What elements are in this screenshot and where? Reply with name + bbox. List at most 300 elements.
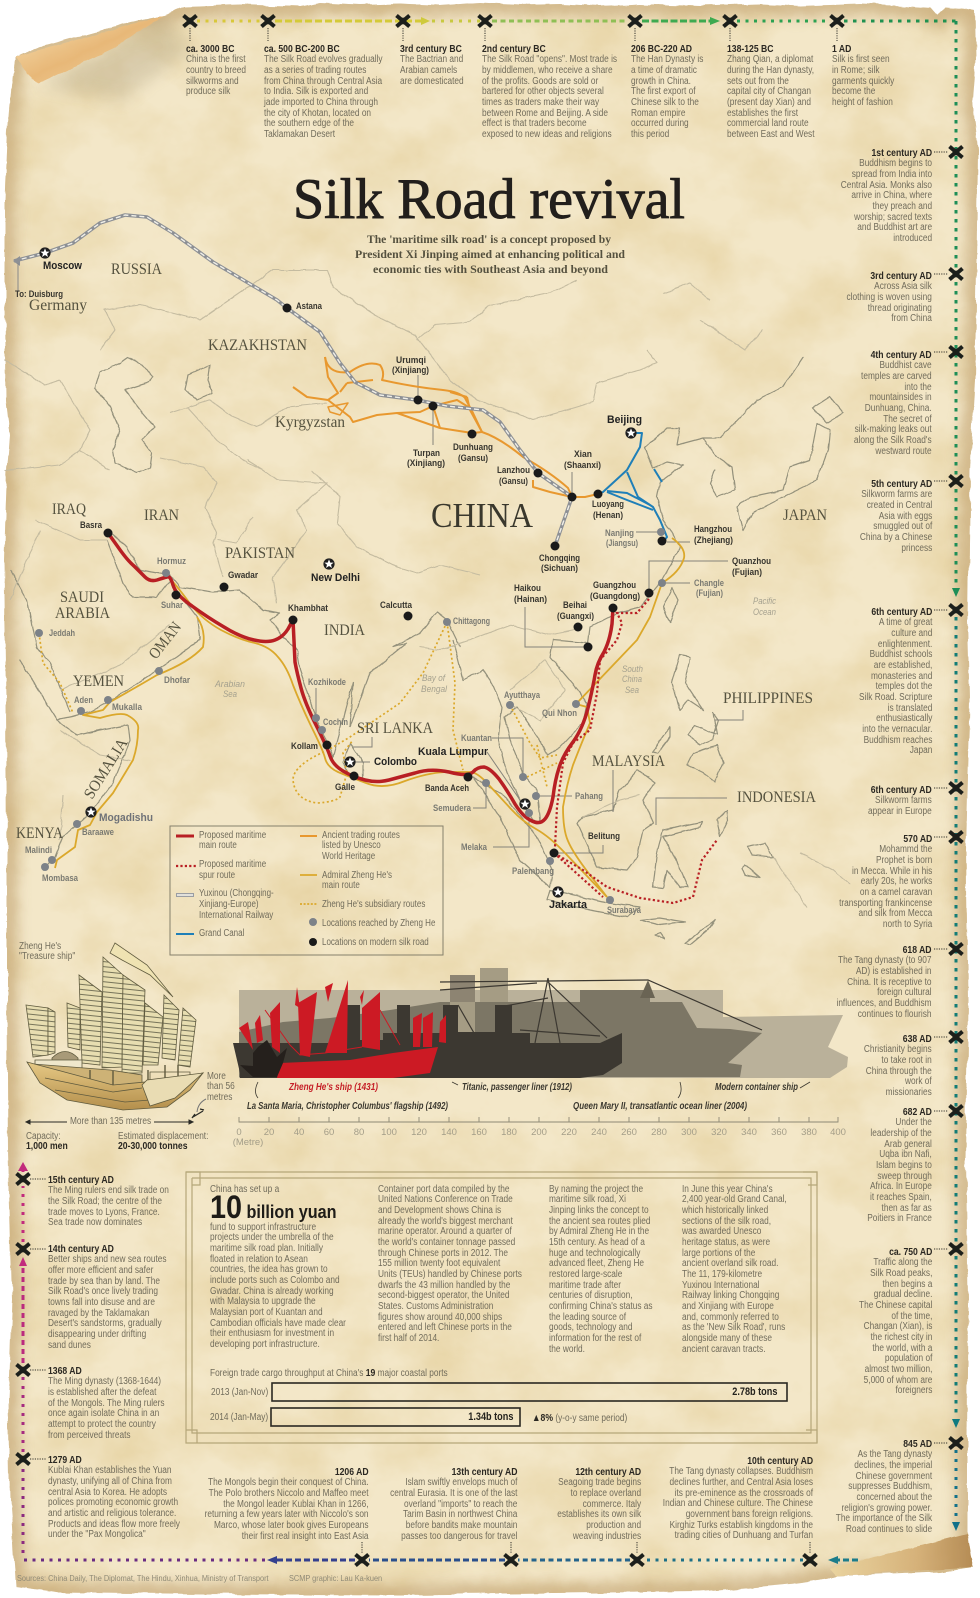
right timeline: ca. 750 AD: Silk Road peaks, (870, 1268, 932, 1279)
panel: column 1 text: floated in relation to Asean (210, 1254, 308, 1265)
legend text: right column: Locations reached by Zheng He (322, 918, 435, 929)
legend text: left column (199, 830, 274, 939)
ship displacement: 20-30,000 tonnes (118, 1141, 188, 1152)
city labels: Hormuz (157, 556, 186, 566)
city labels: Nanjing (605, 528, 634, 538)
top timeline: 2nd century BC: of the profits. Goods are sold or (482, 76, 598, 87)
top timeline: ca. 3000 BC: China is the first (186, 54, 246, 65)
metre scale axis: 60 (324, 1127, 334, 1138)
city labels: Basra (80, 520, 103, 530)
panel: 10 billion yuan headline: 10 billion yuan (210, 1188, 337, 1224)
right timeline: 618 AD: influences, and Buddhism (837, 998, 932, 1009)
right timeline: 6th century AD: Silk Road. Scripture (859, 692, 932, 703)
metre scale axis: 380 (801, 1127, 817, 1138)
right timeline: 682 AD: Africa. In Europe (870, 1181, 932, 1192)
panel: column 4 text: as the 'New Silk Road', runs (682, 1322, 785, 1333)
sea labels: Bengal (421, 684, 448, 694)
top timeline: ca. 500 BC-200 BC: The Silk Road evolves gradually (264, 54, 383, 65)
bottom timeline: 13th century AD: Islam swiftly envelops much of (405, 1477, 517, 1488)
sea labels: South (622, 664, 643, 674)
top timeline: 206 BC-220 AD: The Han Dynasty is (631, 54, 703, 65)
metre scale axis: 0 (236, 1127, 242, 1138)
top timeline: 2nd century BC: by middlemen, who receive a share (482, 65, 613, 76)
top timeline: ca. 500 BC-200 BC: jade imported to China through (264, 97, 378, 108)
panel: column 2 text: entered and left Chinese ports in the (378, 1322, 512, 1333)
right timeline: 5th century AD: Silkworm farms are (861, 489, 932, 500)
panel: column 3 text: information for the rest of (549, 1333, 641, 1344)
city labels: (Gansu) (458, 453, 488, 463)
bottom timeline: 1206 AD: the Mongol leader Kublai Khan in 1266, (224, 1499, 369, 1510)
top timeline: ca. 3000 BC: silkworms and (186, 76, 239, 87)
city labels: Urumqi (396, 355, 426, 365)
panel: column 4 text: which historically linked (682, 1205, 768, 1216)
city labels: Mogadishu (99, 812, 153, 824)
metre scale axis: 360 (771, 1127, 787, 1138)
right timeline: 6th century AD: enlightenment. (878, 639, 932, 650)
right timeline: ca. 750 AD: ca. 750 AD (889, 1246, 932, 1258)
left timeline: 14th century AD: trade by sea than by land. The (48, 1276, 160, 1287)
subtitle: economic ties with Southeast Asia and beyond (373, 262, 608, 276)
left timeline: 15th century AD: the Silk Road; the centre of the (48, 1196, 162, 1207)
right timeline: 682 AD: it reaches Spain, (870, 1192, 932, 1203)
panel: column 1 text: Malaysian port of Kuantan and (210, 1307, 323, 1318)
right timeline: ca. 750 AD: of the time, (891, 1311, 932, 1322)
right timeline: 682 AD: Poitiers in France (867, 1213, 932, 1224)
Titanic silhouette (233, 1005, 622, 1078)
right timeline: ca. 750 AD (859, 1246, 932, 1396)
city labels: Banda Aceh (425, 783, 469, 793)
top timeline: 1 AD: height of fashion (832, 97, 893, 108)
ship height note: than 56 (207, 1081, 235, 1092)
country labels: CHINA (431, 496, 534, 535)
metre scale axis: 140 (441, 1127, 457, 1138)
right timeline: 570 AD: north to Syria (883, 919, 932, 930)
bottom timeline: 12th century AD: to replace overland (570, 1488, 641, 1499)
top timeline: 138-125 BC: commercial land route (727, 118, 809, 129)
right timeline: 618 AD: China. It is receptive to (848, 977, 932, 988)
ship length note: More than 135 metres (70, 1116, 151, 1126)
city labels: (Xinjiang) (392, 365, 429, 375)
city labels: Haikou (514, 583, 541, 593)
city labels: Beijing (607, 414, 642, 426)
bottom timeline: 1206 AD: The Mongols begin their conquest of China. (208, 1477, 369, 1488)
right timeline: 618 AD: continues to flourish (858, 1009, 932, 1020)
country labels: MALAYSIA (592, 753, 665, 770)
city labels: Mukalla (112, 702, 143, 712)
city labels: Malindi (25, 845, 52, 855)
right timeline: 4th century AD: silk-making leaks out (855, 424, 932, 435)
right timeline: 570 AD: on a camel caravan (860, 887, 932, 898)
legend text: right column: Ancient trading routes (322, 830, 400, 840)
panel: column 3 text: advanced fleet, Zheng He (549, 1258, 644, 1269)
metre scale axis: 200 (531, 1127, 547, 1138)
bottom timeline: 12th century AD: weaving industries (573, 1531, 641, 1542)
top timeline: ca. 3000 BC: ca. 3000 BC (186, 44, 234, 54)
treasure ship dimension arrows (26, 1099, 206, 1124)
panel: column 3 text: the leading source of (549, 1312, 626, 1323)
panel: column 4 text: The 11, 179-kilometre (682, 1269, 762, 1280)
country labels: SAUDI (60, 589, 104, 606)
right timeline: 5th century AD (860, 478, 932, 554)
panel: column 2 text: marine operator. Around a quarter of (378, 1226, 512, 1237)
legend text: right column: Locations on modern silk road (322, 937, 429, 948)
top timeline: 2nd century BC: bartered for other objects several (482, 86, 604, 97)
right timeline: 6th century AD: Buddhist schools (869, 649, 932, 660)
top timeline: ca. 500 BC-200 BC: the city of Khotan, located on (264, 108, 371, 119)
panel: column 3 text: 15th century. As head of a (549, 1237, 645, 1248)
left timeline: 1279 AD (48, 1454, 180, 1540)
country labels: SOMALIA (81, 735, 132, 802)
sea labels (214, 596, 776, 699)
top timeline: 206 BC-220 AD: Roman empire (631, 108, 685, 119)
title: Silk Road revival (293, 168, 685, 231)
city labels: Jeddah (49, 628, 75, 638)
location dots reached by Zheng He (35, 528, 666, 904)
city labels: Moscow (43, 260, 82, 272)
bottom timeline: 1206 AD: The Polo brothers Niccolo and Maffeo meet (209, 1488, 369, 1499)
top timeline: 206 BC-220 AD: growth in China. (631, 76, 691, 87)
right timeline: 618 AD: 618 AD (903, 944, 932, 956)
left timeline: 1368 AD: 1368 AD (48, 1366, 82, 1376)
right timeline: ca. 750 AD: almost two million, (864, 1364, 932, 1375)
panel: column 1 text: their enthusiasm for investment in (210, 1328, 334, 1339)
left timeline: 14th century AD: offer more efficient and safer (48, 1265, 153, 1276)
bottom timeline: 10th century AD: declines further, and Central Asia loses (670, 1477, 813, 1488)
right timeline: 638 AD: missionaries (886, 1087, 932, 1098)
right timeline: 638 AD: to take root in (882, 1055, 932, 1066)
right timeline: ca. 750 AD: Changan (Xian), is (863, 1321, 932, 1332)
panel: column 3 text: maritime trade after (549, 1280, 621, 1291)
bottom timeline: 12th century AD: 12th century AD (575, 1466, 641, 1478)
city labels: Baraawe (82, 827, 114, 837)
right timeline: 618 AD: foreign cultural (878, 987, 932, 998)
country labels: IRAN (144, 507, 179, 524)
legend text: right column: Admiral Zheng He's (322, 870, 392, 881)
top timeline: ca. 3000 BC: country to breed (186, 65, 246, 76)
panel: column 2 text: first half of 2014. (378, 1333, 439, 1344)
city labels: Semudera (433, 803, 472, 813)
country labels: Germany (29, 297, 87, 314)
top timeline: 3rd century BC: are domesticated (400, 76, 464, 87)
panel: column 2 text: figures show around 40,000 ships (378, 1312, 502, 1323)
sea labels: Ocean (753, 607, 776, 617)
panel: column 1 text (210, 1222, 346, 1351)
top timeline: 3rd century BC (400, 44, 464, 87)
country labels: SRI LANKA (357, 720, 433, 737)
ship name labels: Modern container ship (715, 1082, 798, 1093)
panel: column 4 text: alongside many of these (682, 1333, 772, 1344)
city labels: (Zhejiang) (694, 535, 733, 545)
city labels: Xian (574, 449, 592, 459)
top timeline: 2nd century BC: 2nd century BC (482, 44, 546, 54)
left timeline: 15th century AD (48, 1174, 169, 1228)
left timeline: 1368 AD: The Ming dynasty (1368-1644) (48, 1376, 161, 1387)
right timeline: 682 AD: 682 AD (903, 1106, 932, 1118)
city labels: Chongqing (539, 553, 580, 563)
panel: column 3 text: restored large-scale (549, 1269, 622, 1280)
city labels: Calcutta (380, 600, 413, 610)
right timeline: 845 AD: religion's growing power. (841, 1503, 932, 1514)
right timeline: ca. 750 AD: The Chinese capital (859, 1300, 932, 1311)
top timeline: 138-125 BC: (present day Xian) and (727, 97, 811, 108)
bottom timeline: 13th century AD: central Eurasia. It is one of the last (390, 1488, 517, 1499)
city labels: (Hainan) (514, 594, 547, 604)
right timeline: ca. 750 AD: then begins a (882, 1279, 932, 1290)
bottom timeline: 10th century AD (663, 1456, 814, 1541)
ship capacity: 1,000 men (26, 1141, 68, 1152)
country labels: YEMEN (73, 673, 124, 690)
treasure ship caption (19, 940, 75, 962)
city labels: (Guangxi) (557, 611, 594, 621)
right timeline: 6th century AD: A time of great (878, 617, 932, 628)
chart label 2014: 2014 (Jan-May) (210, 1412, 268, 1422)
leader lines for labels (316, 375, 743, 853)
panel: column 4 text: and, commonly referred to (682, 1312, 779, 1323)
right timeline: 570 AD: early 20s, he works (860, 876, 932, 887)
panel: column 1 text: with Malaysia to upgrade the (210, 1296, 316, 1307)
route: Zheng He subsidiary routes (dotted gold) (39, 622, 557, 803)
panel: column 3 text: huge and technologically (549, 1248, 640, 1259)
timeline: bottom segment (23, 1556, 858, 1564)
top timeline: ca. 500 BC-200 BC: the southern edge of the (264, 118, 354, 129)
bottom timeline: 13th century AD: before bandits make mountain (405, 1520, 517, 1531)
ship name labels: Zheng He's ship (1431) (288, 1082, 379, 1093)
right timeline: 845 AD: concerned about the (856, 1492, 932, 1503)
left timeline: 14th century AD: disappearing under drifting (48, 1329, 146, 1340)
right timeline: 3rd century AD: from China (891, 313, 932, 324)
panel: column 4 text: heritage status, as were (682, 1237, 770, 1248)
left timeline: 1368 AD: once again isolate China in an (48, 1408, 159, 1419)
graphic credit: SCMP graphic: Lau Ka-kuen (289, 1574, 382, 1582)
right timeline: 638 AD: Christianity begins (864, 1044, 932, 1055)
right timeline: 1st century AD: 1st century AD (871, 148, 932, 158)
city labels: Luoyang (592, 499, 624, 509)
panel: column 3 text: centuries of disruption, (549, 1290, 633, 1301)
right timeline: 570 AD: transporting frankincense (839, 898, 932, 909)
top timeline: 1 AD (832, 44, 894, 108)
panel: column 4 text (682, 1184, 787, 1355)
sea labels: Arabian (214, 679, 245, 689)
bottom timeline: 10th century AD: The Tang dynasty collapses. Buddhism (669, 1466, 813, 1477)
panel: column 4 text: Railway linking Chongqing (682, 1290, 779, 1301)
metre scale axis: 400 (830, 1127, 846, 1138)
legend box (170, 826, 443, 955)
right timeline: 4th century AD: temples are carved (861, 371, 932, 382)
right timeline: 1st century AD: Central Asia. Monks also (841, 180, 932, 191)
top timeline: ca. 500 BC-200 BC (264, 44, 383, 140)
panel: column 4 text: sections of the silk road, (682, 1216, 771, 1227)
panel: column 3 text: maritime silk road, Xi (549, 1194, 626, 1205)
sea labels: Pacific (753, 596, 776, 606)
panel: column 4 text: ancient overland silk road. (682, 1258, 778, 1269)
country labels: PHILIPPINES (723, 690, 813, 707)
right timeline: 3rd century AD: thread originating (868, 303, 932, 314)
panel: column 4 text: In June this year China's (682, 1184, 773, 1194)
right timeline: 845 AD: 845 AD (903, 1438, 932, 1450)
right timeline: 4th century AD: mountainsides in (870, 392, 932, 403)
top timeline: 2nd century BC: The Silk Road "opens". Most trade is (482, 54, 617, 65)
left timeline: 14th century AD: ravaged by the Taklamakan (48, 1308, 149, 1319)
city labels: Gwadar (228, 570, 258, 580)
metre scale axis: 320 (711, 1127, 727, 1138)
panel: column 4 text: ancient caravan tracts. (682, 1344, 766, 1355)
info panel frame (186, 1172, 817, 1443)
right timeline: 6th century AD, Europe: appear in Europe (868, 806, 932, 817)
top timeline: 138-125 BC: Zhang Qian, a diplomat (727, 54, 813, 65)
panel: column 2 text (378, 1184, 522, 1345)
left timeline: 15th century AD: 15th century AD (48, 1174, 114, 1186)
ship displacement (118, 1132, 208, 1153)
Santa Maria silhouette (240, 1040, 287, 1077)
top timeline: 1 AD: 1 AD (832, 44, 851, 54)
right timeline: 845 AD: Road continues to slide (846, 1524, 932, 1535)
metre scale axis: 180 (501, 1127, 517, 1138)
city labels: Cochin (323, 717, 348, 727)
legend text: left column: Yuxinou (Chongqing- (199, 888, 274, 899)
city labels: (Shaanxi) (564, 460, 601, 470)
top timeline: 2nd century BC: exposed to new ideas and religions (482, 129, 612, 140)
map base: land borders (5, 270, 850, 907)
ship name labels: Titanic, passenger liner (1912) (462, 1082, 573, 1093)
left timeline: 15th century AD: trade moves to Lyons, France. (48, 1207, 160, 1218)
left timeline: 1368 AD: of the Mongols. The Ming rulers (48, 1398, 165, 1409)
panel: column 3 text: By naming the project the (549, 1184, 643, 1194)
bottom timeline: 1206 AD (205, 1466, 369, 1542)
left timeline: 1279 AD: dynasty, unifying all of China from (48, 1476, 172, 1487)
bottom timeline: 12th century AD (557, 1466, 642, 1542)
bottom timeline: 13th century AD: 13th century AD (451, 1466, 517, 1478)
right timeline: 638 AD (864, 1034, 932, 1098)
city labels: (Fujian) (696, 588, 723, 598)
treasure ship illustration (26, 943, 203, 1110)
timeline: top segment (197, 17, 956, 25)
map base: coastlines and borders (10, 357, 843, 945)
Zheng He ship silhouette (239, 980, 446, 1078)
legend text: right column (322, 830, 436, 948)
top timeline: 2nd century BC: between Rome and Beijing. A side (482, 108, 608, 119)
ship height note: metres (207, 1092, 232, 1103)
sources: Sources: China Daily, The Diplomat, The Hindu, Xinhua, Ministry of Transport (17, 1574, 269, 1582)
panel: column 3 text (549, 1184, 653, 1355)
bottom timeline: 10th century AD: government bans foreign religions. (686, 1509, 813, 1520)
route: Yuxinou railway (14, 215, 572, 546)
treasure ship caption: "Treasure ship" (19, 951, 75, 962)
left timeline: 14th century AD: Better ships and new sea routes (48, 1254, 167, 1265)
metre scale axis: 300 (681, 1127, 697, 1138)
legend text: right column: main route (322, 880, 360, 891)
left timeline: 14th century AD: towns fall into disuse and are (48, 1297, 155, 1308)
chart change note: ▲8% (y-o-y same period) (532, 1412, 627, 1424)
right timeline: 4th century AD: 4th century AD (871, 350, 932, 360)
metre scale axis (233, 1117, 846, 1148)
subtitle: President Xi Jinping aimed at enhancing political and (355, 247, 625, 261)
panel: column 2 text: and Development shows China is (378, 1205, 501, 1216)
city labels: Kollam (291, 741, 318, 751)
city labels: Melaka (461, 842, 488, 852)
panel: column 1 text: Gwadar. China is already working (210, 1286, 334, 1297)
city labels: Suhar (161, 600, 183, 610)
city labels: (Xinjiang) (407, 458, 445, 468)
left timeline: 1279 AD: central Asia to Korea. He adopts (48, 1487, 167, 1498)
sea labels: Bay of (422, 673, 446, 683)
right timeline: ca. 750 AD: Traffic along the (873, 1257, 932, 1268)
left timeline: 15th century AD: Sea trade now dominates (48, 1217, 142, 1228)
ship height note: More (207, 1070, 226, 1082)
panel: column 3 text: confirming China's status as (549, 1301, 653, 1312)
panel: column 3 text: the world. (549, 1344, 585, 1355)
left timeline: 1279 AD: Kublai Khan establishes the Yuan (48, 1465, 172, 1476)
panel: column 2 text: through Chinese ports in 2012. The (378, 1248, 508, 1259)
city labels: Mombasa (42, 873, 79, 883)
sea labels: Sea (223, 689, 237, 699)
right timeline: 682 AD: leadership of the (871, 1128, 932, 1139)
right timeline: 618 AD: AD) is established in (856, 966, 932, 977)
city labels: Dhofar (164, 675, 190, 685)
top timeline: 138-125 BC: 138-125 BC (727, 44, 774, 54)
country labels: Kyrgyzstan (275, 414, 345, 431)
right timeline: 5th century AD: China by a Chinese (860, 532, 932, 543)
right timeline: 3rd century AD: clothing is woven using (847, 292, 932, 303)
right timeline: 682 AD: Islam begins to (876, 1160, 932, 1171)
city labels: Khambhat (288, 603, 328, 613)
city labels: Changle (694, 578, 724, 588)
metre scale axis: 220 (561, 1127, 577, 1138)
left timeline: 1279 AD: 1279 AD (48, 1454, 82, 1466)
city labels: Turpan (413, 448, 440, 458)
top timeline: 138-125 BC: capital city of Changan (727, 86, 811, 97)
right timeline: 845 AD: suppresses Buddhism, (848, 1481, 932, 1492)
route: Grand Canal (blue) (598, 433, 667, 542)
city labels: Dunhuang (453, 442, 493, 452)
location dots on modern silk road (104, 304, 666, 858)
city labels: Galle (335, 782, 355, 792)
top timeline: ca. 3000 BC (186, 44, 246, 97)
panel: column 1 text: maritime silk road plan. Initially (210, 1243, 323, 1254)
right timeline: 570 AD: and silk from Mecca (858, 908, 932, 919)
top timeline: ca. 500 BC-200 BC: Taklamakan Desert (264, 129, 335, 140)
right timeline: 6th century AD: are established, (873, 660, 932, 671)
right timeline: 845 AD (836, 1438, 932, 1535)
timeline: left segment (18, 1162, 28, 1553)
top timeline: ca. 500 BC-200 BC: ca. 500 BC-200 BC (264, 44, 340, 54)
city labels: Kuala Lumpur (418, 746, 489, 758)
left timeline: 14th century AD: 14th century AD (48, 1244, 114, 1254)
bottom timeline: 13th century AD: passes too dangerous for travel (401, 1531, 517, 1542)
city labels: Lanzhou (497, 465, 530, 475)
right timeline: 845 AD: declines, the imperial (854, 1460, 932, 1471)
panel: column 1 text: Cambodian officials have made clear (210, 1318, 346, 1329)
panel: column 4 text: was awarded Unesco (682, 1226, 761, 1237)
legend text: right column: Zheng He's subsidiary routes (322, 899, 425, 910)
right timeline: 682 AD: Under the (896, 1117, 932, 1128)
legend text: left column: spur route (199, 870, 235, 881)
panel: column 1 text: fund to support infrastructure (210, 1222, 316, 1232)
panel: column 1 text: include ports such as Colombo and (210, 1275, 340, 1286)
metre scale axis: 100 (381, 1127, 397, 1138)
right timeline: 4th century AD: Dunhuang, China. (865, 403, 932, 414)
panel: column 1 text: countries, the idea has grown to (210, 1264, 328, 1275)
right timeline: 6th century AD: Buddhism reaches (863, 735, 932, 746)
right timeline: ca. 750 AD: foreigners (895, 1385, 932, 1396)
city labels: (Gansu) (499, 476, 528, 486)
top timeline: 1 AD: Silk is first seen (832, 54, 890, 65)
right timeline: 5th century AD: princess (901, 543, 932, 554)
city labels: To: Duisburg (15, 289, 63, 299)
sea labels: China (622, 674, 642, 684)
legend text: left column: Xinjiang-Europe) (199, 899, 259, 910)
panel: column 4 text: large portions of the (682, 1248, 755, 1259)
right timeline: 845 AD: The importance of the Silk (836, 1513, 932, 1524)
